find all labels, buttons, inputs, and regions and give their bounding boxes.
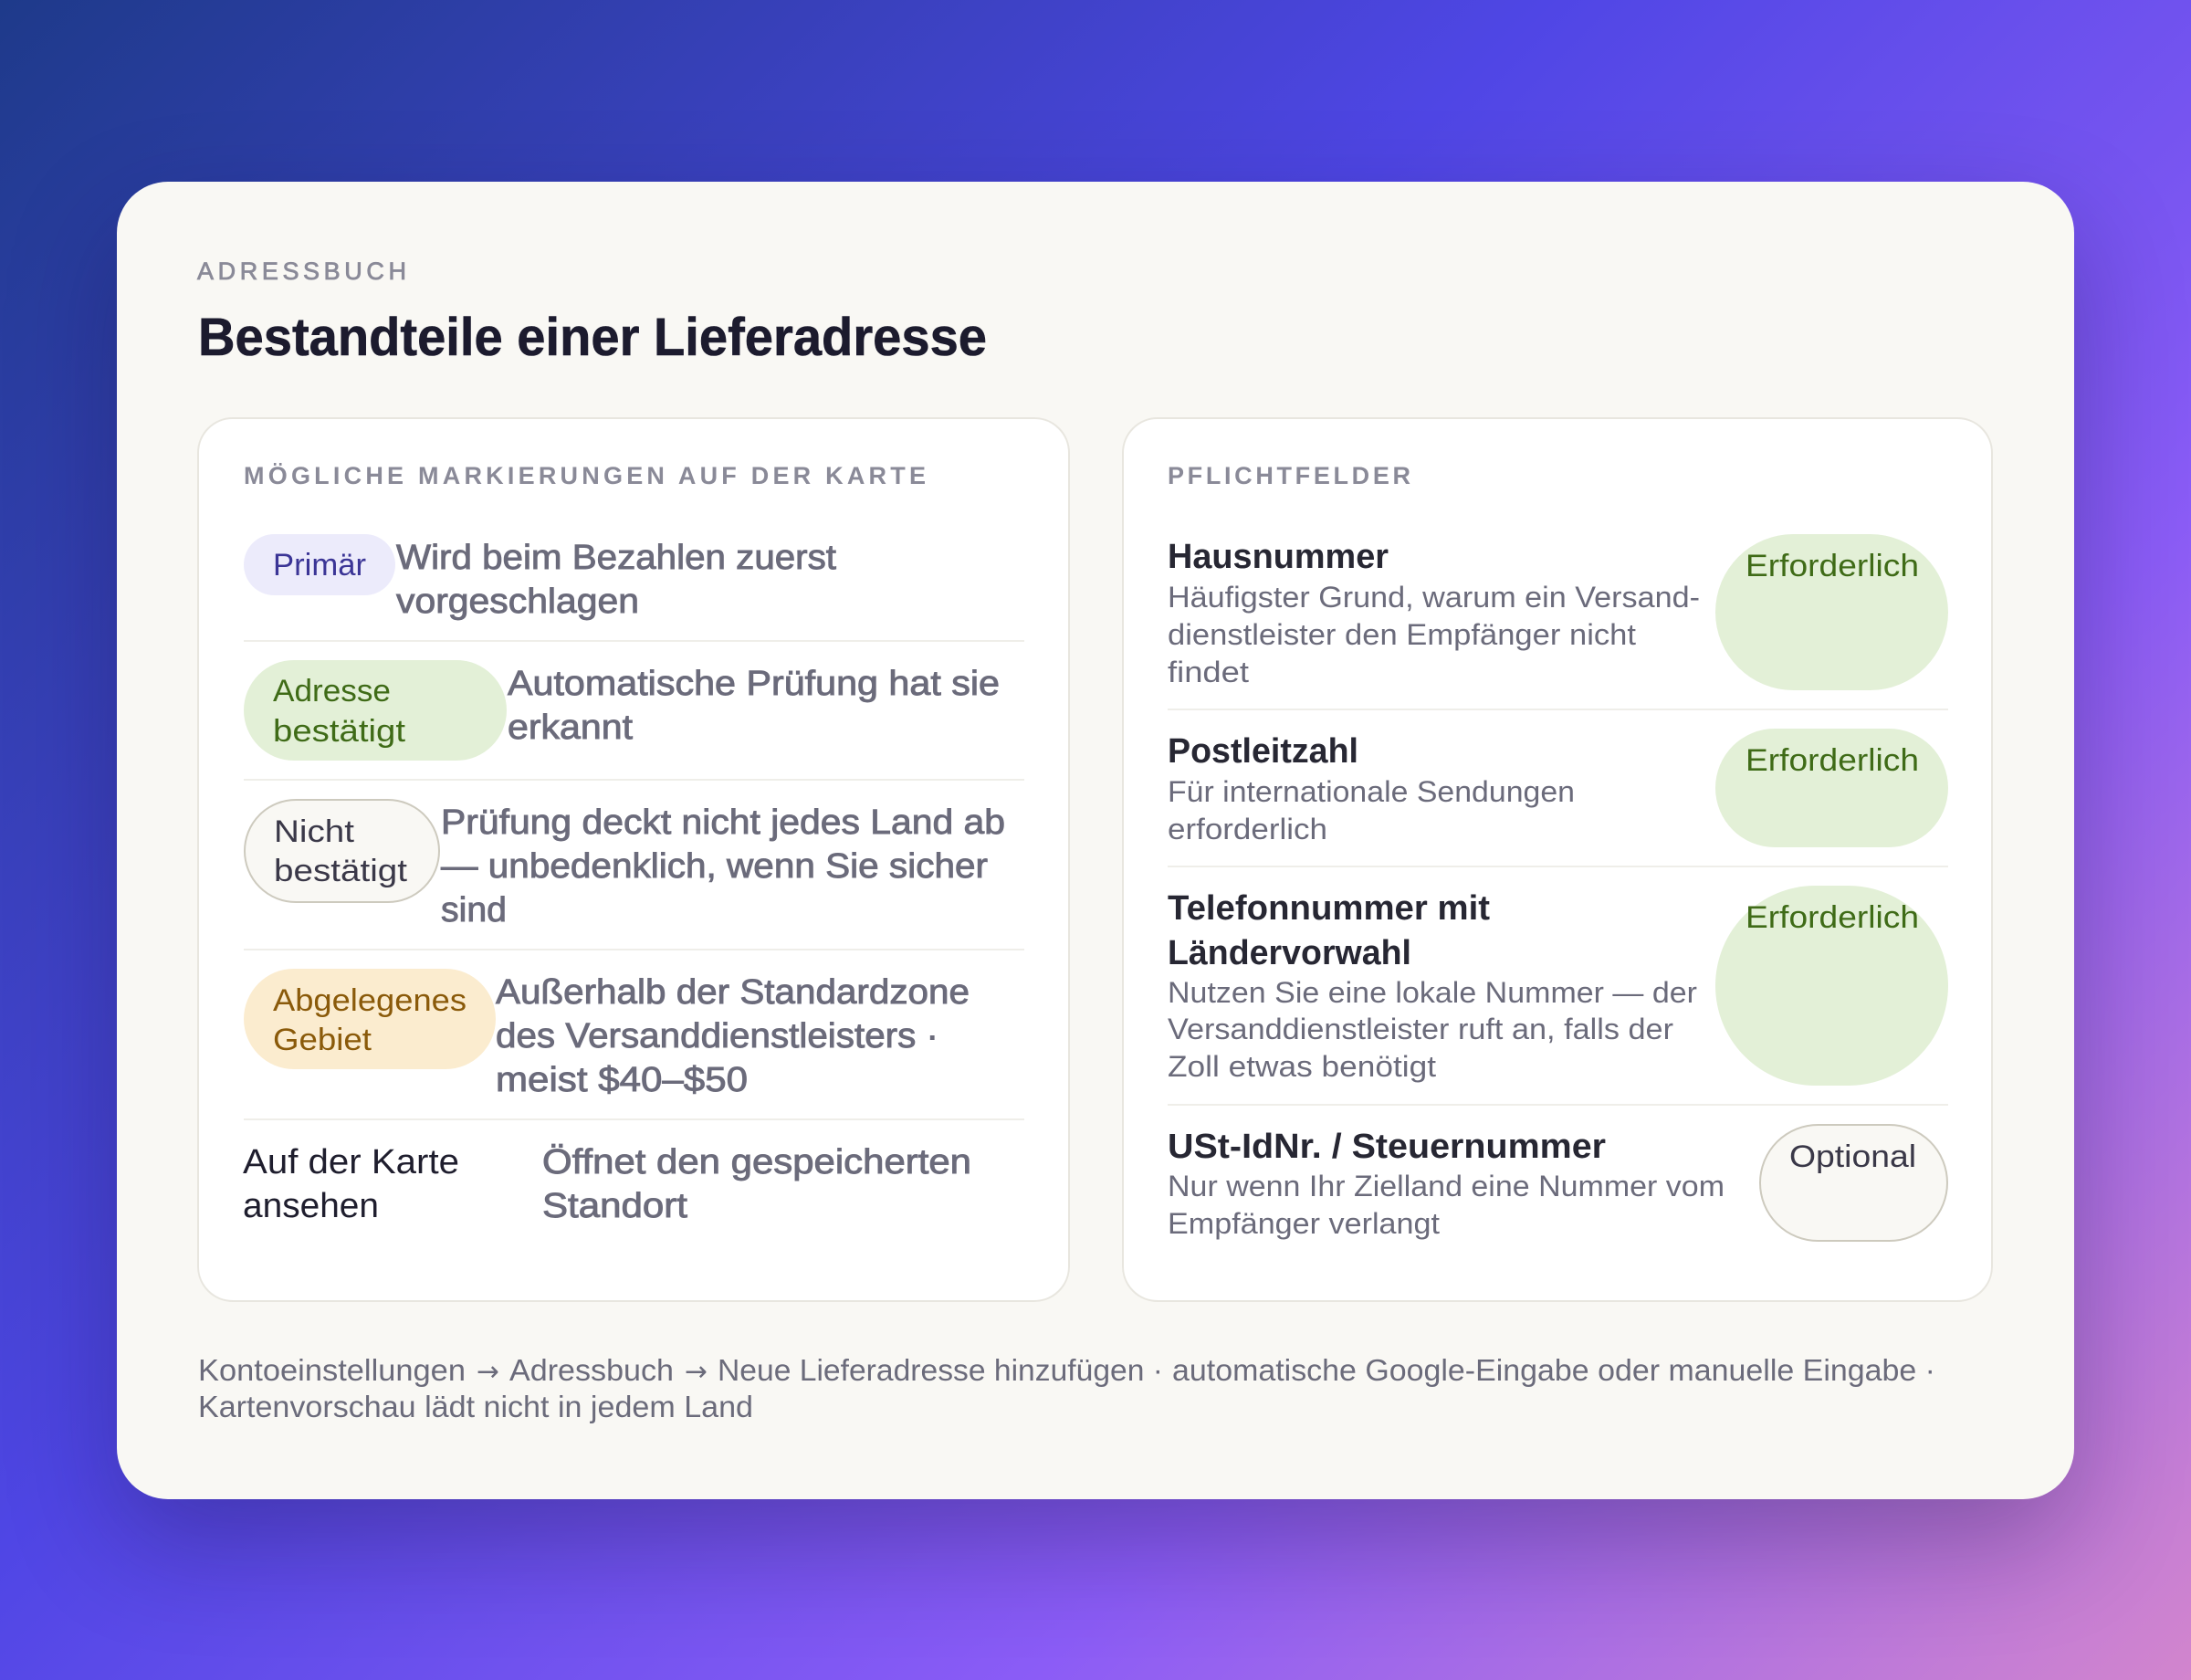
description: sind [441,891,507,929]
field text: dienstleister den Empfänger nicht [1168,618,1636,651]
badge: Erforderlich: Erforderlich [1745,900,1919,935]
footer note: → [477,1356,499,1388]
description: Automatische Prüfung hat sie [508,665,1000,703]
description: Außerhalb der Standardzone [496,973,970,1012]
description: vorgeschlagen [396,583,639,621]
field text: Nutzen Sie eine lokale Nummer — der [1168,976,1697,1009]
field: Hausnummer [1168,534,1948,690]
row: Nicht bestätigt [245,800,1005,929]
row: Adresse bestätigt [244,660,1000,761]
badge: Erforderlich [1715,729,1948,847]
badge: Primär [244,534,395,595]
field text: findet [1168,656,1249,688]
field text: Postleitzahl [1168,732,1358,771]
description: Wird beim Bezahlen zuerst [396,539,836,577]
field text: Hausnummer [1168,538,1389,576]
panel: Mögliche Markierungen auf der Karte [198,418,1069,1301]
badge: Abgelegenes Gebiet: Abgelegenes [273,983,467,1018]
field text: Häufigster Grund, warum ein Versand- [1168,581,1700,614]
badge: Erforderlich [1715,886,1948,1086]
label: Auf der Karte ansehen: Auf der Karte [243,1143,459,1181]
badge: Nicht bestätigt: Nicht [274,814,355,849]
description [508,665,1000,747]
footer note: Kartenvorschau lädt nicht in jedem Land [198,1390,753,1423]
field: Telefonnummer mit Ländervorwahl [1168,886,1948,1086]
badge: Abgelegenes Gebiet: Gebiet [273,1023,372,1057]
field text [1168,889,1697,1083]
panel heading: MÖGLICHE MARKIERUNGEN AUF DER KARTE [244,462,926,489]
badge: Erforderlich [1715,534,1948,690]
field text: Zoll etwas benötigt [1168,1050,1436,1083]
badge: Abgelegenes Gebiet [244,969,496,1069]
footer note: → [685,1356,708,1388]
row: Auf der Karte ansehen [243,1143,971,1225]
field text: Versanddienstleister ruft an, falls der [1168,1013,1673,1045]
footer note: Kontoeinstellungen [198,1353,466,1387]
eyebrow: Adressbuch: ADRESSBUCH [197,257,406,285]
field text: USt-IdNr. / Steuernummer [1168,1128,1606,1166]
label: Auf der Karte ansehen [243,1143,459,1225]
footer note: Adressbuch [509,1353,674,1387]
field text: Telefonnummer mit [1168,889,1490,928]
description: des Versanddienstleisters · [496,1017,938,1055]
badge: Adresse bestätigt: Adresse [273,674,391,709]
description: Standort [542,1187,687,1225]
description: Öffnet den gespeicherten [542,1143,971,1181]
description: Prüfung deckt nicht jedes Land ab [441,803,1005,842]
panel: Pflichtfelder [1123,418,1992,1301]
badge: Optional: Optional [1789,1139,1916,1174]
field text [1168,732,1575,845]
description: erkannt [508,709,633,747]
panel heading: PFLICHTFELDER [1168,462,1410,489]
badge: Optional [1760,1125,1947,1241]
title: Bestandteile einer Lieferadresse [198,308,987,367]
label: Auf der Karte ansehen: ansehen [243,1187,379,1225]
badge: Primär: Primär [273,548,366,583]
card [117,182,2074,1499]
field text: erforderlich [1168,813,1327,845]
row: Primär [244,534,836,621]
badge: Nicht bestätigt [245,800,439,902]
description [496,973,970,1099]
badge: Erforderlich: Erforderlich [1745,549,1919,583]
field text: Für internationale Sendungen [1168,775,1575,808]
field text: Ländervorwahl [1168,934,1411,972]
footer note: automatische Google-Eingabe oder manuelle Eingabe · [1172,1353,1935,1387]
description: — unbedenklich, wenn Sie sicher [441,847,988,886]
footer note: Neue Lieferadresse hinzufügen · [718,1353,1163,1387]
description [396,539,836,621]
field text [1168,538,1700,688]
field: Postleitzahl [1168,729,1948,847]
badge: Adresse bestätigt: bestätigt [273,714,406,749]
row: Abgelegenes Gebiet [244,969,970,1099]
description: meist $40–$50 [496,1061,748,1099]
field: USt-IdNr. / Steuernummer [1168,1125,1947,1241]
badge: Erforderlich: Erforderlich [1745,743,1919,778]
footer note [198,1353,1935,1423]
field text [1168,1128,1724,1240]
description [542,1143,971,1225]
field text: Nur wenn Ihr Zielland eine Nummer vom [1168,1170,1724,1202]
badge: Nicht bestätigt: bestätigt [274,854,408,888]
field text: Empfänger verlangt [1168,1207,1440,1240]
badge: Adresse bestätigt [244,660,507,761]
description [441,803,1005,929]
